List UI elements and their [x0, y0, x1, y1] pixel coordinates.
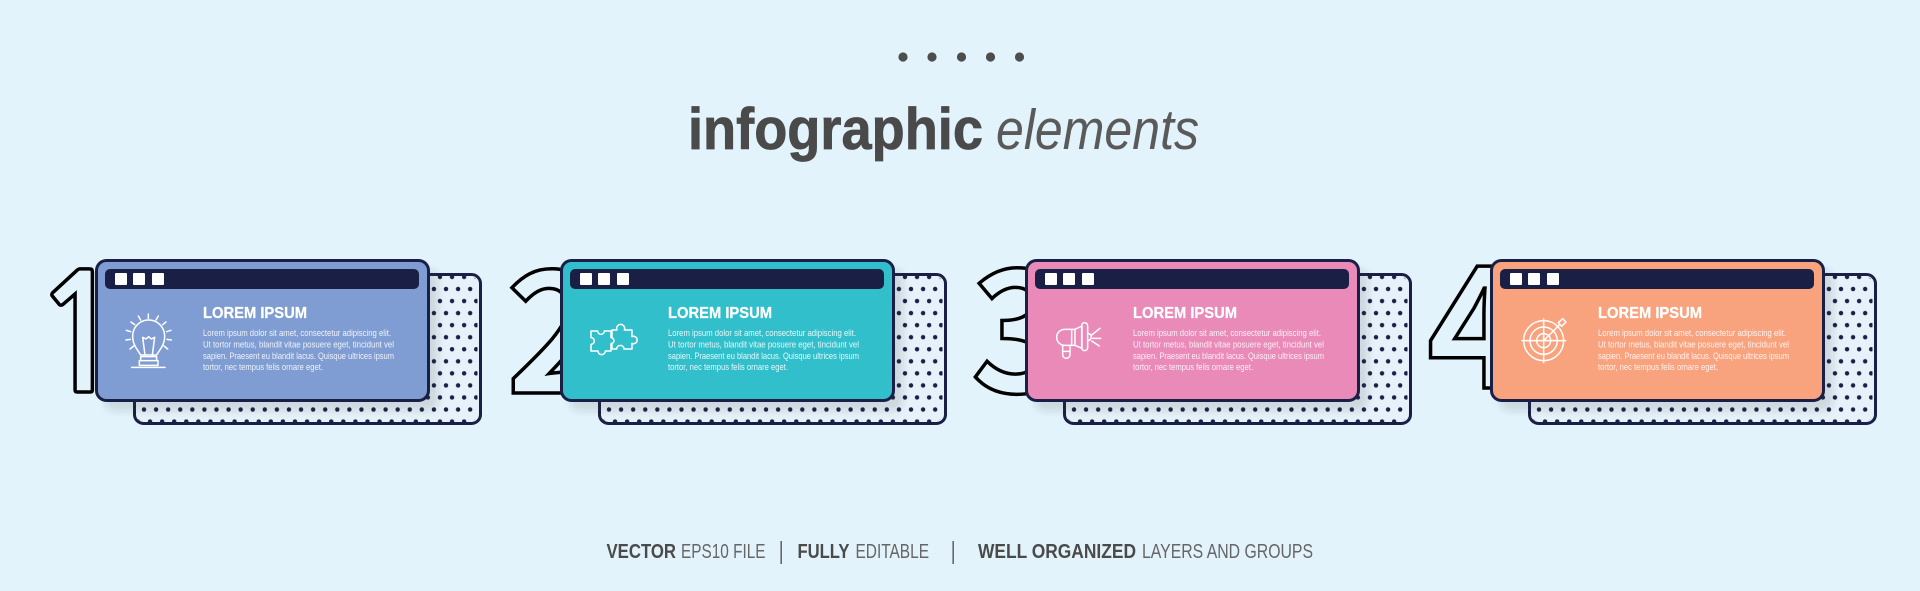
body text 3	[1133, 328, 1324, 372]
icon: megaphone	[1057, 323, 1101, 358]
card shadow 4	[1500, 269, 1833, 411]
body text 1: sapien. Praesent eu blandit lacus. Quisque ultrices ipsum	[203, 351, 394, 361]
number 2: 2	[506, 197, 606, 442]
title: elements	[996, 98, 1199, 162]
body text 2: sapien. Praesent eu blandit lacus. Quisque ultrices ipsum	[668, 351, 859, 361]
body text 1: Lorem ipsum dolor sit amet, consectetur adipiscing elit.	[203, 328, 391, 338]
card shadow 1	[105, 269, 438, 411]
card shadow 3	[1035, 269, 1368, 411]
body text 4: Ut tortor metus, blandit vitae posuere eget, tincidunt vel	[1598, 340, 1789, 350]
card 2	[562, 260, 894, 400]
step 1	[31, 256, 480, 424]
window bar 4	[1500, 269, 1814, 289]
body text 1	[203, 328, 394, 372]
card 4	[1492, 260, 1824, 400]
body text 2: Lorem ipsum dolor sit amet, consectetur adipiscing elit.	[668, 328, 856, 338]
heading 4: LOREM IPSUM	[1598, 305, 1702, 322]
title	[688, 97, 1199, 162]
body text 3: sapien. Praesent eu blandit lacus. Quisque ultrices ipsum	[1133, 351, 1324, 361]
body text 1: Ut tortor metus, blandit vitae posuere eget, tincidunt vel	[203, 340, 394, 350]
footer caption: LAYERS AND GROUPS	[1142, 540, 1313, 563]
heading 3: LOREM IPSUM	[1133, 305, 1237, 322]
icon: target with arrow	[1522, 319, 1566, 363]
footer caption: VECTOR	[606, 540, 676, 563]
window bar 3	[1035, 269, 1349, 289]
icon: light bulb	[126, 314, 171, 367]
heading 1: LOREM IPSUM	[203, 305, 307, 322]
number 3: 3	[971, 196, 1071, 441]
title: infographic	[688, 97, 983, 162]
body text 4: tortor, nec tempus felis ornare eget.	[1598, 362, 1718, 372]
body text 4	[1598, 328, 1789, 372]
number 4: 4	[1427, 192, 1527, 437]
dotted back panel 2	[600, 274, 946, 424]
card shadow 2	[570, 269, 903, 411]
icon: puzzle pieces	[591, 324, 637, 355]
heading 2: LOREM IPSUM	[668, 305, 772, 322]
body text 2: Ut tortor metus, blandit vitae posuere eget, tincidunt vel	[668, 340, 859, 350]
body text 2	[668, 328, 859, 372]
footer caption	[606, 540, 1313, 564]
window bar 1	[105, 269, 419, 289]
dotted back panel 4	[1530, 274, 1876, 424]
window bar 2	[570, 269, 884, 289]
dotted back panel 1	[134, 274, 480, 424]
body text 1: tortor, nec tempus felis ornare eget.	[203, 362, 323, 372]
body text 3: tortor, nec tempus felis ornare eget.	[1133, 362, 1253, 372]
card 1	[96, 260, 428, 400]
step 2	[506, 197, 946, 442]
footer caption: EPS10 FILE	[681, 540, 766, 563]
footer caption: EDITABLE	[856, 540, 929, 563]
step 3	[971, 196, 1410, 441]
body text 4: Lorem ipsum dolor sit amet, consectetur adipiscing elit.	[1598, 328, 1786, 338]
footer caption: FULLY	[798, 540, 850, 563]
body text 3: Lorem ipsum dolor sit amet, consectetur adipiscing elit.	[1133, 328, 1321, 338]
decorative dots row	[898, 52, 1024, 62]
card 3	[1026, 260, 1358, 400]
step 4	[1427, 192, 1876, 437]
dotted back panel 3	[1064, 274, 1410, 424]
number 1: 1	[31, 256, 129, 416]
body text 3: Ut tortor metus, blandit vitae posuere eget, tincidunt vel	[1133, 340, 1324, 350]
footer caption: WELL ORGANIZED	[978, 540, 1136, 563]
body text 4: sapien. Praesent eu blandit lacus. Quisque ultrices ipsum	[1598, 351, 1789, 361]
body text 2: tortor, nec tempus felis ornare eget.	[668, 362, 788, 372]
